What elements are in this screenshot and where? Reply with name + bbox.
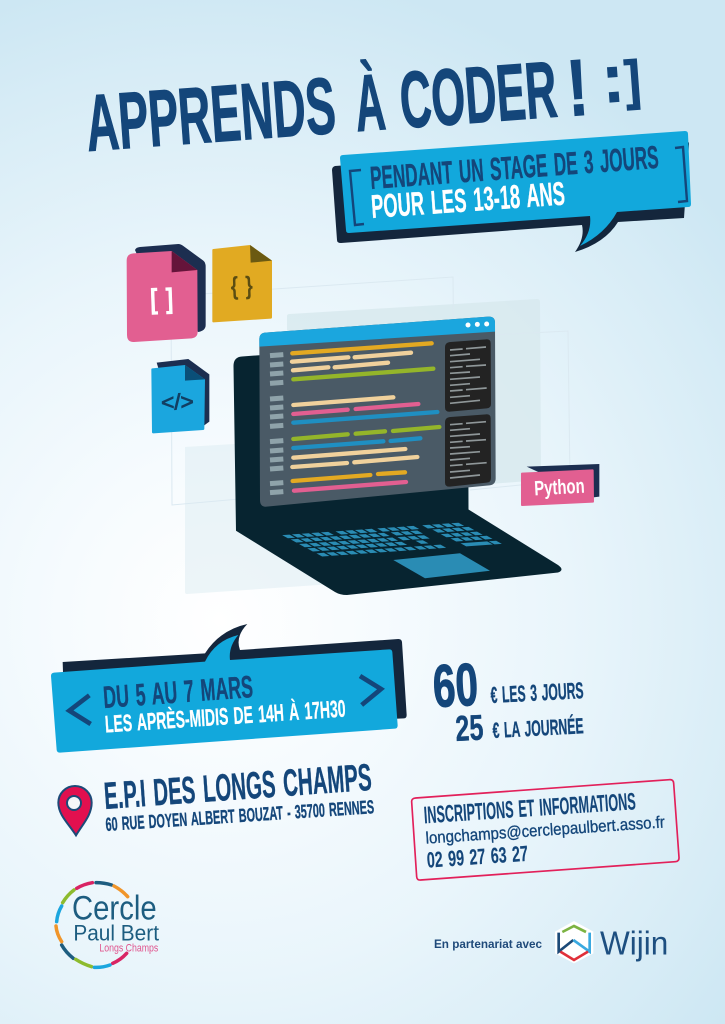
speech bubble: stage [332,131,691,252]
logo ring [56,883,128,967]
line numbers [270,355,283,493]
title: ] [622,50,643,111]
icon: location pin [58,786,92,835]
window buttons [465,321,489,327]
icon: blue file [151,359,209,433]
location text: 60 RUE DOYEN ALBERT BOUZAT - 35700 RENNES [105,797,375,836]
prices: 60 [431,651,480,720]
logo: Cercle Paul Bert: Cercle [72,889,157,927]
title: À [352,57,388,148]
dates text: LES APRÈS-MIDIS DE 14H À 17H30 [104,695,346,738]
title: CODER [397,45,560,145]
location text [103,757,375,836]
info box: 02 99 27 63 27 [426,841,529,873]
speech bubble: dates [51,624,407,753]
logo: Cercle Paul Bert: Longs Champs [99,943,158,955]
python tag [521,464,599,506]
icon: yellow file [212,245,272,322]
title: : [600,40,626,117]
icon: pink file [127,244,206,342]
partner label: En partenariat avec [434,937,542,951]
location text: E.P.I DES LONGS CHAMPS [103,757,373,818]
touchpad [393,553,490,578]
dates text [102,669,346,738]
title: APPRENDS [83,61,339,168]
prices: € LES 3 JOURS [490,677,584,708]
prices: 25 [454,707,484,749]
speech bubble: stage: POUR LES 13-18 ANS [370,175,566,225]
side panels [445,339,491,412]
background panels [171,277,570,594]
prices [431,651,584,749]
logo: Cercle Paul Bert [56,883,159,967]
keyboard [285,524,501,555]
info box: longchamps@cerclepaulbert.asso.fr [425,812,666,848]
laptop [234,340,562,595]
logo: Wijin: Wijin [600,925,668,962]
code window [259,317,496,507]
dates text: DU 5 AU 7 MARS [102,669,254,715]
logo: Cercle Paul Bert: Paul Bert [73,921,159,946]
laptop body [234,340,562,595]
prices: € LA JOURNÉE [492,713,584,743]
python tag: Python [534,475,585,500]
info box [412,780,679,880]
icon: yellow file: { } [230,272,253,301]
icon: blue file: </> [161,389,194,415]
title: ! [564,43,591,133]
code lines [292,343,439,491]
logo: Wijin [555,921,668,963]
icon: pink file: [ ] [150,283,174,315]
